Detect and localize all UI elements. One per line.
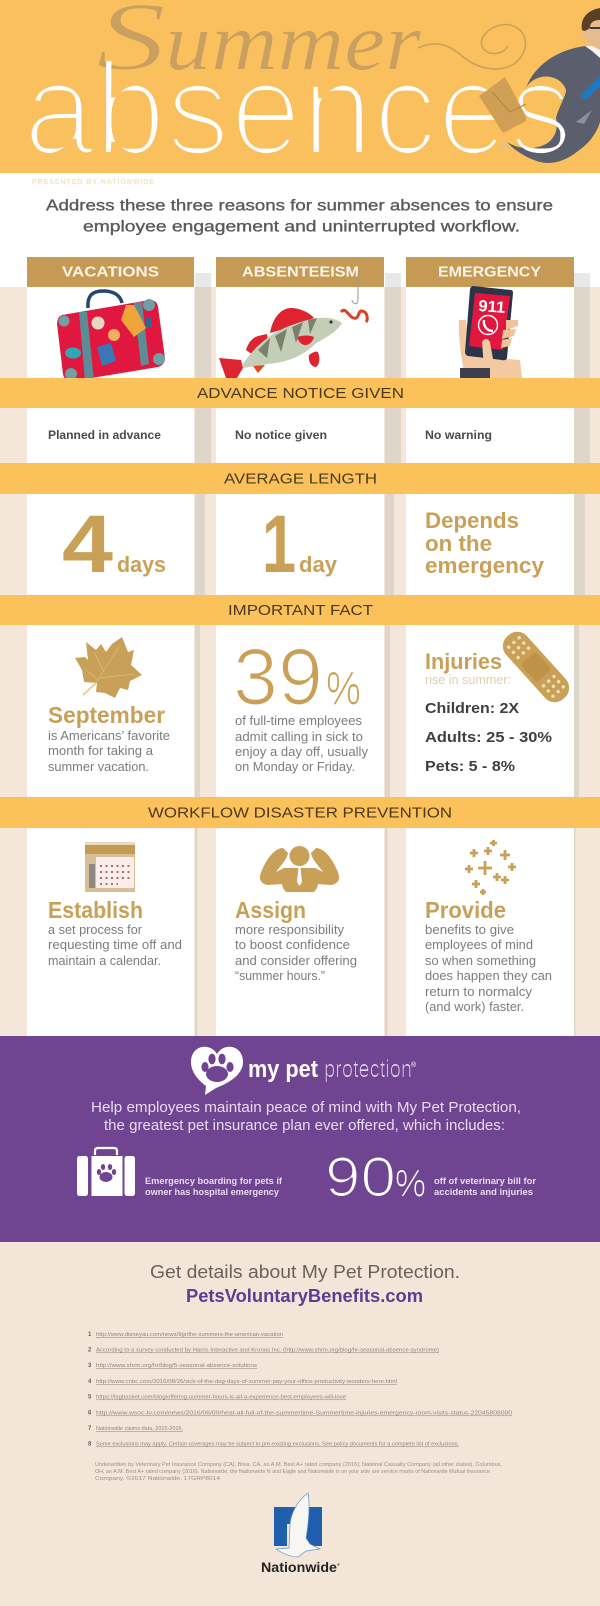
icon: hand holding phone with 911 [459, 286, 522, 378]
footnote numbers: 3 [88, 1363, 92, 1369]
logo text [248, 1056, 417, 1083]
section bar: workflow disaster prevention: WORKFLOW DISASTER PREVENTION [148, 804, 452, 822]
stat: 90 percent [325, 1145, 426, 1208]
title swirl [418, 25, 526, 69]
column header: emergency: EMERGENCY [438, 264, 541, 280]
text: injuries fact: Adults: 25 - 30% [425, 729, 552, 746]
text: emergency boarding: Emergency boarding for pets if [145, 1176, 283, 1187]
footnotes list: Nationwide claims data, 2015-2016. [96, 1426, 183, 1432]
stat: 1 day: 1 [262, 499, 296, 590]
stat: 4 days: 4 [62, 499, 113, 590]
text: 39 percent fact [235, 714, 369, 774]
text: provide: employees of mind [425, 938, 533, 952]
stat: 4 days [62, 499, 166, 590]
legal text: OH, an A.M. Best A+ rated company (2016). Nationwide, the Nationwide N and Eagle and Nationwide is on your side are service marks of Nationwide Mutual Insurance [95, 1469, 490, 1475]
text: assign: and consider offering [235, 954, 357, 968]
text: september fact: summer vacation. [48, 760, 149, 774]
presented by line: PRESENTED BY NATIONWIDE [32, 179, 154, 186]
footnotes list [96, 1332, 512, 1448]
text: emergency boarding [145, 1176, 283, 1198]
text: establish: requesting time off and [48, 938, 182, 952]
text: establish: Establish [48, 897, 143, 923]
stat: 1 day: day [299, 552, 338, 577]
text: veterinary bill: off of veterinary bill for [434, 1176, 536, 1187]
stat: depends on the emergency: on the [425, 531, 492, 556]
text: 39 percent fact: enjoy a day off, usually [235, 745, 369, 759]
text: provide: does happen they can [425, 969, 552, 983]
section bar: average length: AVERAGE LENGTH [224, 470, 377, 488]
legal text [95, 1462, 502, 1482]
intro text: employee engagement and uninterrupted workflow. [83, 218, 520, 236]
logo: heart with paw [191, 1047, 243, 1095]
section bar: important fact [0, 595, 600, 625]
section bar: important fact: IMPORTANT FACT [228, 602, 373, 619]
text: assign: Assign [235, 897, 306, 923]
text: provide: Provide [425, 897, 506, 923]
text: september fact: September [48, 702, 165, 728]
text: injuries fact: Children: 2X [425, 700, 519, 717]
icon: pet carrier [77, 1148, 135, 1196]
text: 39 percent fact: of full-time employees [235, 714, 362, 728]
text: september fact: month for taking a [48, 744, 153, 758]
text: provide: benefits to give [425, 923, 514, 937]
text: provide: return to normalcy [425, 985, 533, 999]
text: provide: so when something [425, 954, 536, 968]
footnotes list: http://www.wsoc-tv.com/news/2016/06/09/heat-all-full-of-the-summertime-Summertime-injuries-emergency-room-visits-status-22045808080 [96, 1410, 512, 1416]
stat: depends on the emergency [425, 508, 544, 578]
stat: 90 percent: 90 [325, 1145, 396, 1208]
stat: 1 day [262, 499, 338, 590]
stat: depends on the emergency: Depends [425, 508, 519, 533]
icon: sparkles [465, 840, 516, 895]
section bar: advance notice given: ADVANCE NOTICE GIVEN [197, 385, 404, 402]
text: no warning: No warning [425, 428, 492, 442]
text: september fact [48, 702, 170, 774]
logo: nationwide: ® [337, 1562, 340, 1567]
text: establish [48, 897, 182, 968]
call to action: PetsVoluntaryBenefits.com [186, 1286, 423, 1306]
footnote numbers: 8 [88, 1442, 92, 1448]
text: establish: maintain a calendar. [48, 954, 161, 968]
footnotes list: http://www.cnbc.com/2016/08/26/sick-of-the-dog-days-of-summer-pay-your-office-productivity-wonders-here.html [96, 1379, 397, 1385]
footnote numbers [88, 1332, 92, 1448]
section bar: workflow disaster prevention [0, 797, 600, 828]
text: injuries fact: Pets: 5 - 8% [425, 758, 515, 775]
stat: 39 percent: 39 [233, 632, 323, 721]
text: help employees [91, 1100, 521, 1134]
panel: my pet protection [0, 1036, 600, 1242]
logo text: my pet [248, 1056, 318, 1083]
footnotes list: https://tsgbasket.com/blog/offering-summer-hours-is-all-a-experience-best-employees-will-love [96, 1394, 346, 1400]
text: veterinary bill [434, 1176, 536, 1198]
text: establish: a set process for [48, 923, 142, 937]
icon: hand holding phone with 911: 911 [478, 298, 506, 317]
stat: 39 percent: % [326, 662, 361, 714]
text: no notice given: No notice given [235, 428, 327, 442]
text: 39 percent fact: admit calling in sick to [235, 730, 363, 744]
column header: vacations [27, 257, 194, 287]
icon: bandage [497, 626, 575, 708]
footnote numbers: 4 [88, 1379, 92, 1385]
text: assign: to boost confidence [235, 938, 350, 952]
illustration: briefcase [479, 77, 526, 150]
column header: vacations: VACATIONS [62, 264, 159, 280]
text: planned in advance: Planned in advance [48, 428, 161, 442]
footnote numbers: 7 [88, 1426, 92, 1432]
footnotes list: Some exclusions may apply. Certain coverages may be subject to pre-existing exclusions. See policy documents for a complete list of exclusions. [96, 1442, 459, 1448]
illustration: businessman suit [507, 8, 600, 163]
text: injuries fact: Injuries [425, 649, 502, 674]
footnotes list: http://www.disneyau.com/news/9gr/the-summers-the-american-vacation [96, 1332, 283, 1338]
icon: maple leaf [75, 637, 142, 698]
text: emergency boarding: owner has hospital emergency [145, 1187, 280, 1198]
title: Summer [96, 0, 422, 90]
text: provide: (and work) faster. [425, 1000, 524, 1014]
footnote numbers: 2 [88, 1348, 92, 1354]
icon: flexing businessman [260, 846, 339, 892]
text: assign: more responsibility [235, 923, 345, 937]
text: injuries fact: rise in summer: [425, 673, 511, 687]
call to action [150, 1262, 460, 1306]
column header: absenteeism: ABSENTEEISM [242, 264, 359, 280]
text: veterinary bill: accidents and injuries [434, 1187, 533, 1198]
footnote numbers: 6 [88, 1410, 92, 1416]
column header: absenteeism [216, 257, 384, 287]
legal text: Underwritten by Veterinary Pet Insurance Company (CA), Brea, CA, an A.M. Best A+ rated company (2016); National Casualty Company (all other states), Columbus, [95, 1462, 502, 1468]
logo: nationwide [261, 1493, 340, 1575]
intro text: Address these three reasons for summer absences to ensure [46, 198, 553, 214]
stat: 39 percent [233, 632, 361, 721]
stat: 90 percent: % [395, 1163, 426, 1205]
icon: fish and hook [219, 273, 367, 378]
footnotes list: http://www.shrm.org/hr/blog/5-seasonal-absence-solutions [96, 1363, 257, 1369]
header banner [0, 0, 600, 182]
call to action: Get details about My Pet Protection. [150, 1262, 460, 1282]
text: injuries fact [425, 649, 552, 775]
section bar: advance notice given [0, 378, 600, 408]
footnote numbers: 5 [88, 1394, 92, 1400]
footnotes list: According to a survey conducted by Harris Interactive and Kronos Inc. (http://www.shrm.org/blog/hr-seasonal-absence-syndrome) [96, 1348, 439, 1354]
stat: 4 days: days [117, 552, 166, 577]
logo: nationwide: Nationwide [261, 1560, 338, 1575]
text: september fact: is Americans’ favorite [48, 729, 170, 743]
stat: depends on the emergency: emergency [425, 553, 544, 578]
section bar: average length [0, 463, 600, 494]
title: absences: absences [23, 35, 573, 182]
logo text: protection [324, 1056, 412, 1083]
logo text: ® [411, 1061, 417, 1069]
column header: emergency [406, 257, 574, 287]
footnote numbers: 1 [88, 1332, 92, 1338]
legal text: Company. ©2017 Nationwide. 17GRP8014 [95, 1475, 220, 1482]
title: Summer: ummer [165, 0, 422, 87]
intro text [46, 198, 553, 236]
icon: red suitcase [57, 291, 165, 381]
text: assign [235, 897, 357, 983]
text: 39 percent fact: on Monday or Friday. [235, 760, 355, 774]
panel: footer background [0, 1242, 600, 1606]
text: help employees: Help employees maintain peace of mind with My Pet Protection, [91, 1100, 521, 1116]
icon: calendar [85, 842, 135, 892]
text: provide [425, 897, 552, 1014]
text: assign: “summer hours.” [235, 969, 325, 983]
page background: columns area [0, 273, 600, 1036]
text: help employees: the greatest pet insurance plan ever offered, which includes: [104, 1118, 505, 1134]
